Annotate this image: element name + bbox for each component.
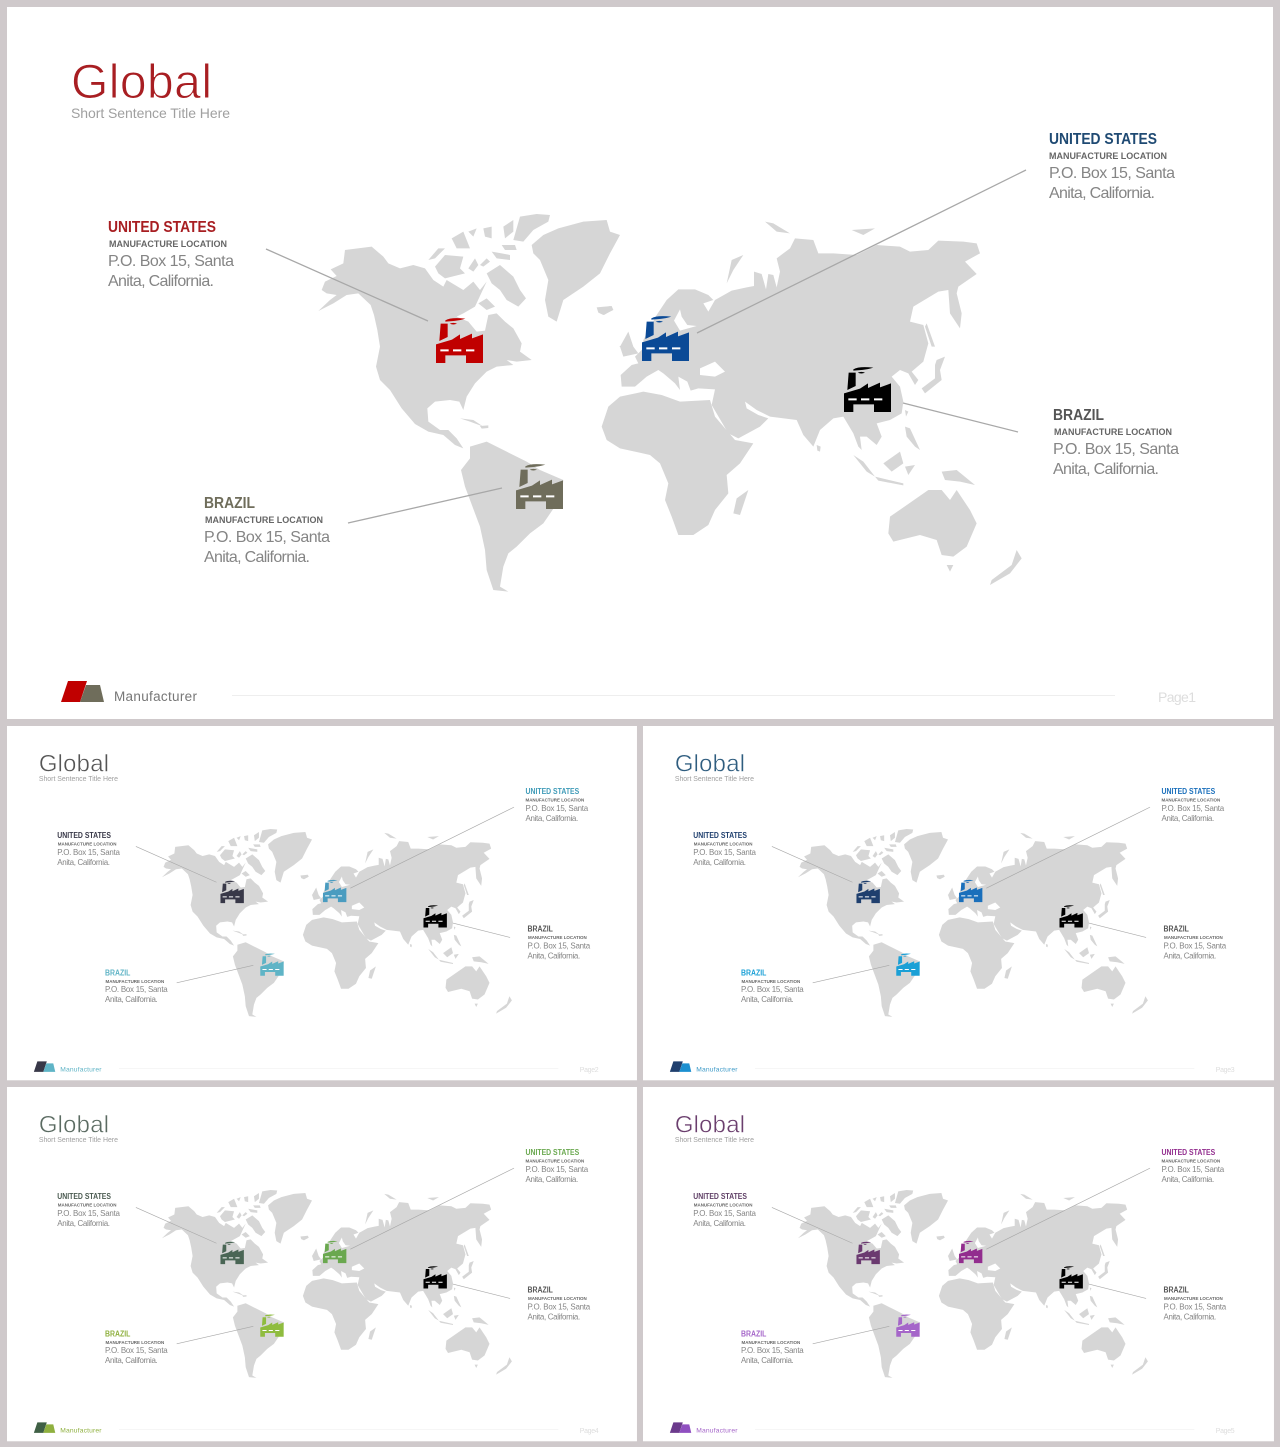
label: Brazil left: BRAZIL <box>204 495 255 512</box>
panel: slide page 4: P.O. Box 15, Santa <box>105 1346 168 1355</box>
panel: slide page 5: MANUFACTURE LOCATION <box>1164 1296 1223 1302</box>
panel: slide page 5: Anita, California. <box>741 1356 794 1365</box>
panel: slide page 4: Global <box>39 1111 109 1138</box>
panel: slide page 2: UNITED STATES <box>525 787 579 796</box>
panel: slide page 5: MANUFACTURE LOCATION <box>742 1340 801 1346</box>
panel: slide page 5: Anita, California. <box>693 1219 746 1228</box>
panel: slide page 4: Page4 <box>580 1428 599 1435</box>
panel: slide page 5: UNITED STATES <box>693 1192 747 1201</box>
panel: slide page 2: BRAZIL <box>527 925 553 934</box>
panel: slide page 3: Page3 <box>1216 1067 1235 1074</box>
icon: factory South America <box>516 464 563 509</box>
panel: slide page 3: Anita, California. <box>741 995 794 1004</box>
panel: slide page 5: Short Sentence Title Here <box>675 1137 754 1144</box>
panel: slide page 4: P.O. Box 15, Santa <box>527 1302 591 1311</box>
panel: slide page 3: MANUFACTURE LOCATION <box>1161 798 1221 804</box>
panel: slide page 4: P.O. Box 15, Santa <box>57 1209 121 1218</box>
panel: slide page 4: MANUFACTURE LOCATION <box>58 1202 117 1208</box>
panel: slide page 5: UNITED STATES <box>1161 1148 1215 1157</box>
panel: slide page 3: BRAZIL <box>741 968 767 977</box>
panel: slide page 5: MANUFACTURE LOCATION <box>694 1202 753 1208</box>
panel: slide page 2: UNITED STATES <box>57 831 111 840</box>
panel: slide page 4 <box>7 1087 637 1441</box>
callout line: Asia <box>903 403 1018 432</box>
world map <box>318 214 1022 592</box>
panel: slide page 5: Manufacturer <box>696 1427 738 1434</box>
panel: slide page 5: P.O. Box 15, Santa <box>741 1346 804 1355</box>
panel: slide page 4: Anita, California. <box>527 1312 580 1321</box>
panel: slide page 5: MANUFACTURE LOCATION <box>1161 1159 1221 1165</box>
panel: slide page 4: BRAZIL <box>105 1329 131 1338</box>
panel: slide page 2: P.O. Box 15, Santa <box>527 941 591 950</box>
label: Brazil right <box>1053 407 1179 478</box>
panel: slide page 4: Anita, California. <box>525 1175 578 1184</box>
panel: slide page 4: UNITED STATES <box>57 1192 111 1201</box>
subtitle: Short Sentence Title Here <box>71 105 230 121</box>
label: United States right <box>1049 131 1175 202</box>
panel: slide page 3: MANUFACTURE LOCATION <box>1164 935 1223 941</box>
label: United States left: P.O. Box 15, Santa <box>108 253 234 270</box>
panel: slide page 5: P.O. Box 15, Santa <box>1163 1302 1227 1311</box>
panel: slide page 2: Global <box>39 750 109 777</box>
panel: slide page 5: BRAZIL <box>741 1329 767 1338</box>
panel: slide page 3: Short Sentence Title Here <box>675 776 754 783</box>
panel: slide page 4: MANUFACTURE LOCATION <box>106 1340 165 1346</box>
panel: slide page 4: Short Sentence Title Here <box>39 1137 118 1144</box>
panel: slide page 3: Anita, California. <box>1161 814 1214 823</box>
panel: slide page 5: P.O. Box 15, Santa <box>693 1209 757 1218</box>
panel: main slide page 1 <box>7 7 1273 719</box>
panel: slide page 2 <box>7 726 637 1080</box>
label: Brazil left: Anita, California. <box>204 549 310 566</box>
panel: slide page 3: P.O. Box 15, Santa <box>693 848 757 857</box>
panel: slide page 3: P.O. Box 15, Santa <box>1163 941 1227 950</box>
panel: slide page 2: P.O. Box 15, Santa <box>525 804 589 813</box>
panel: slide page 2: MANUFACTURE LOCATION <box>106 979 165 985</box>
panel: slide page 5: Global <box>675 1111 745 1138</box>
title: Global <box>71 56 212 109</box>
panel: slide page 3: BRAZIL <box>1163 925 1189 934</box>
label: Brazil right: BRAZIL <box>1053 407 1104 424</box>
footer brand: Manufacturer <box>114 689 198 704</box>
label: Brazil left: P.O. Box 15, Santa <box>204 529 330 546</box>
label: Brazil left <box>204 495 330 566</box>
page number: Page1 <box>1158 689 1196 705</box>
panel: slide page 4: Anita, California. <box>57 1219 110 1228</box>
panel: slide page 3: P.O. Box 15, Santa <box>741 985 804 994</box>
panel: slide page 4: P.O. Box 15, Santa <box>525 1165 589 1174</box>
panel: slide page 5: Anita, California. <box>1163 1312 1216 1321</box>
panel: slide page 3: Global <box>675 750 745 777</box>
panel: slide page 3: P.O. Box 15, Santa <box>1161 804 1225 813</box>
label: Brazil right: Anita, California. <box>1053 461 1159 478</box>
panel: slide page 3: UNITED STATES <box>693 831 747 840</box>
panel: slide page 5: Anita, California. <box>1161 1175 1214 1184</box>
panel: slide page 3: MANUFACTURE LOCATION <box>742 979 801 985</box>
panel: slide page 4: UNITED STATES <box>525 1148 579 1157</box>
label: United States right: Anita, California. <box>1049 185 1155 202</box>
panel: slide page 4: Manufacturer <box>60 1427 102 1434</box>
panel: slide page 4: MANUFACTURE LOCATION <box>525 1159 585 1165</box>
panel: slide page 2: Anita, California. <box>527 951 580 960</box>
panel: slide page 3: Anita, California. <box>693 858 746 867</box>
panel: slide page 3: Manufacturer <box>696 1066 738 1073</box>
callout line: North America <box>266 249 428 321</box>
panel: slide page 5: Page5 <box>1216 1428 1235 1435</box>
label: Brazil right: MANUFACTURE LOCATION <box>1054 427 1172 438</box>
panel: slide page 2: P.O. Box 15, Santa <box>57 848 121 857</box>
panel: slide page 4: MANUFACTURE LOCATION <box>528 1296 587 1302</box>
icon: footer logo <box>61 681 104 702</box>
panel: slide page 2: Anita, California. <box>105 995 158 1004</box>
panel: slide page 2: MANUFACTURE LOCATION <box>528 935 587 941</box>
panel: slide page 2: Manufacturer <box>60 1066 102 1073</box>
label: Brazil right: P.O. Box 15, Santa <box>1053 441 1179 458</box>
panel: slide page 2: MANUFACTURE LOCATION <box>58 841 117 847</box>
label: United States left: UNITED STATES <box>108 219 216 236</box>
label: United States right: MANUFACTURE LOCATION <box>1049 151 1167 162</box>
icon: factory Europe <box>642 316 689 361</box>
panel: slide page 4: BRAZIL <box>527 1286 553 1295</box>
label: United States left: MANUFACTURE LOCATION <box>109 239 227 250</box>
panel: slide page 2: P.O. Box 15, Santa <box>105 985 168 994</box>
label: United States left: Anita, California. <box>108 273 214 290</box>
panel: slide page 3: Anita, California. <box>1163 951 1216 960</box>
label: United States right: P.O. Box 15, Santa <box>1049 165 1175 182</box>
label: United States right: UNITED STATES <box>1049 131 1157 148</box>
panel: slide page 2: Short Sentence Title Here <box>39 776 118 783</box>
panel: slide page 4: Anita, California. <box>105 1356 158 1365</box>
panel: slide page 3: MANUFACTURE LOCATION <box>694 841 753 847</box>
icon: factory Asia <box>844 367 891 412</box>
panel: slide page 3: UNITED STATES <box>1161 787 1215 796</box>
panel: slide page 5: P.O. Box 15, Santa <box>1161 1165 1225 1174</box>
panel: slide page 2: Page2 <box>580 1067 599 1074</box>
label: Brazil left: MANUFACTURE LOCATION <box>205 515 323 526</box>
panel: slide page 2: Anita, California. <box>57 858 110 867</box>
callout line: Europe <box>697 170 1026 333</box>
callout line: South America <box>348 488 502 523</box>
panel: slide page 2: BRAZIL <box>105 968 131 977</box>
panel: slide page 2: MANUFACTURE LOCATION <box>525 798 585 804</box>
label: United States left <box>108 219 234 290</box>
panel: slide page 2: Anita, California. <box>525 814 578 823</box>
icon: factory North America <box>436 318 483 363</box>
panel: slide page 5: BRAZIL <box>1163 1286 1189 1295</box>
panel: slide page 3 <box>643 726 1274 1080</box>
panel: slide page 5 <box>643 1087 1274 1441</box>
